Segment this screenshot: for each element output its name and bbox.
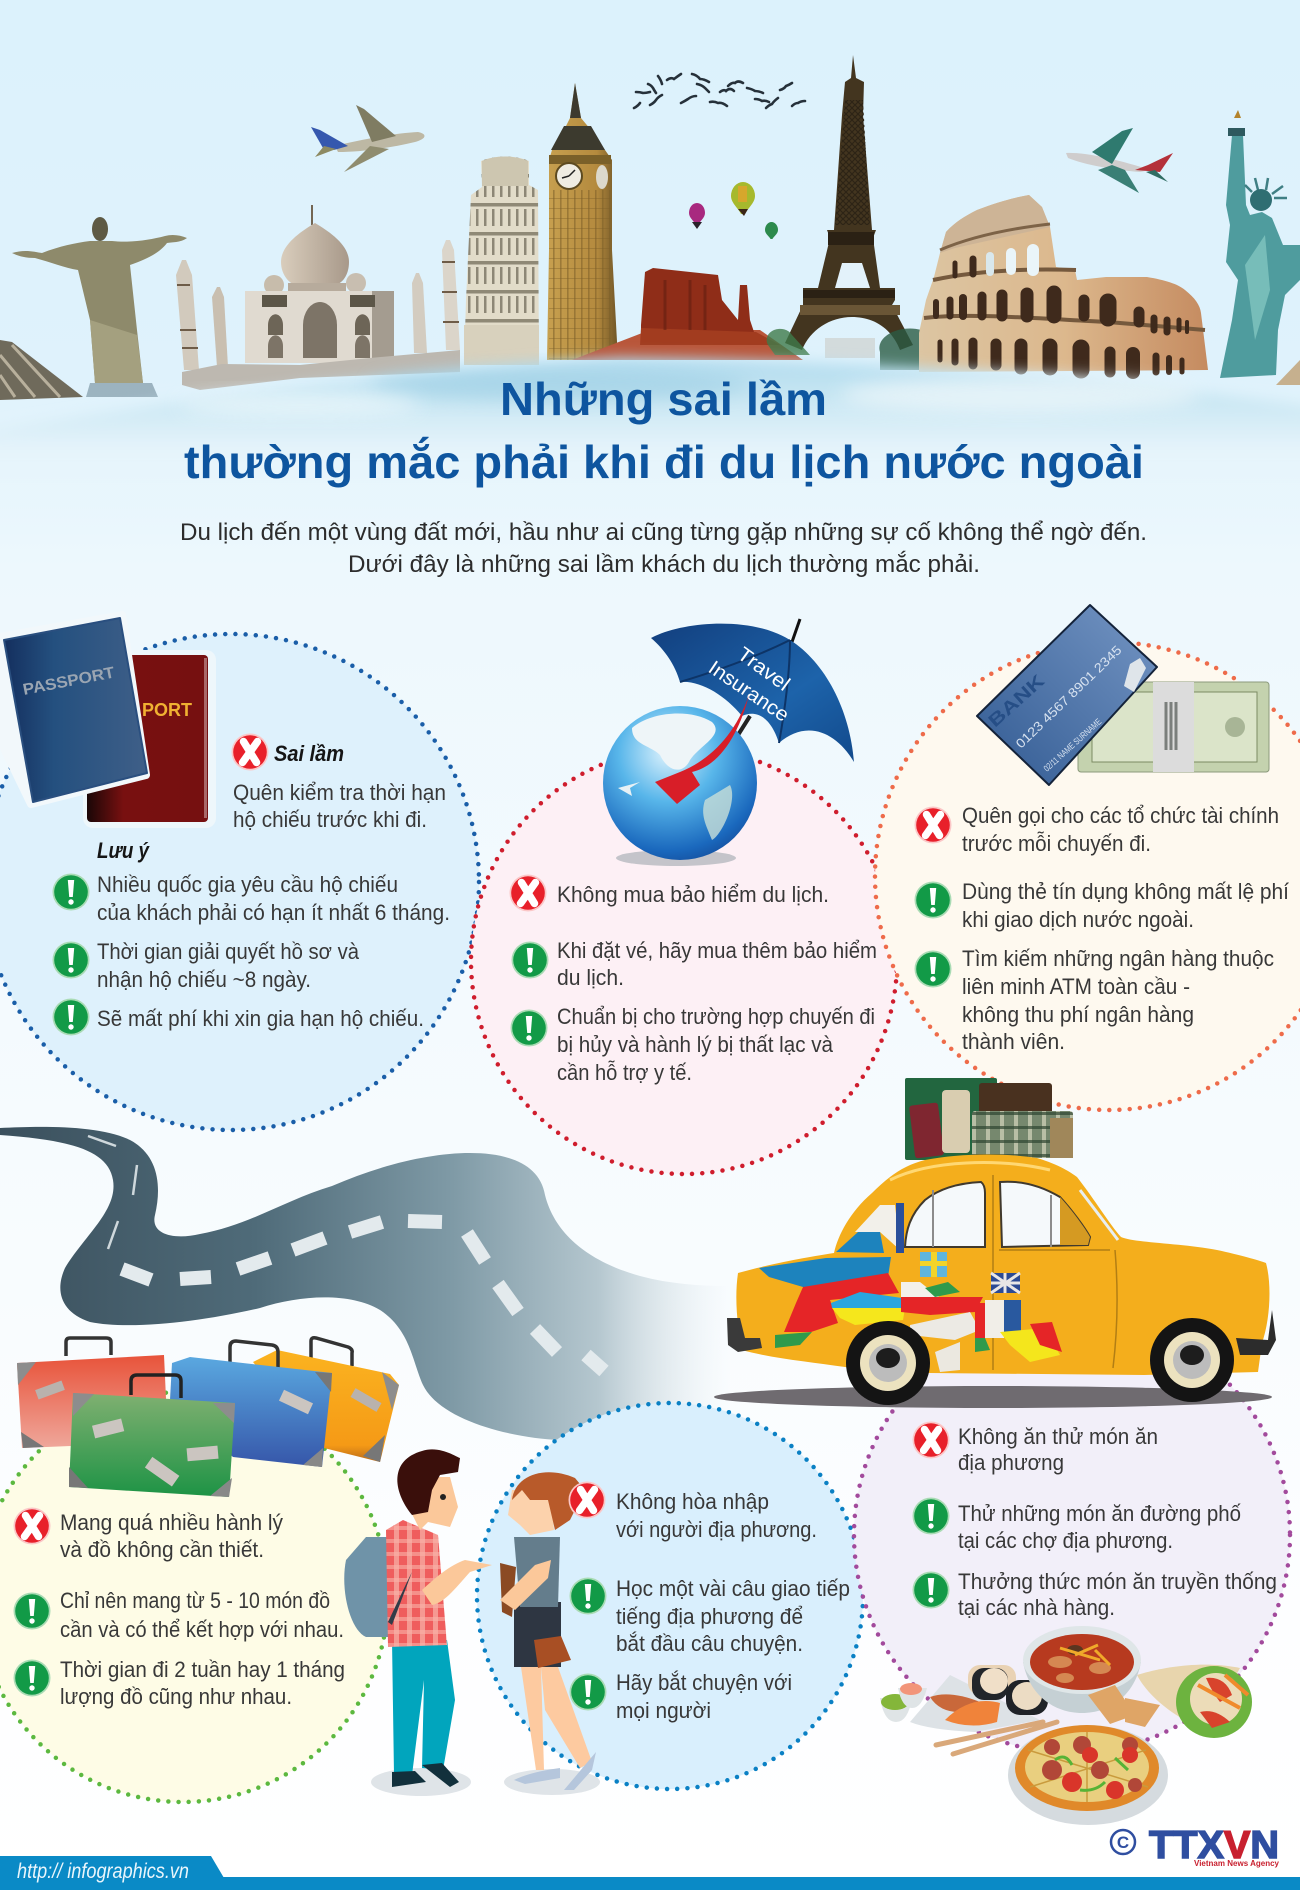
monument valley butte bbox=[572, 268, 803, 360]
tip text: Học một vài câu giao tiếp bbox=[616, 1576, 850, 1601]
tip text: tại các chợ địa phương. bbox=[958, 1528, 1173, 1553]
rear wheel bbox=[1150, 1318, 1234, 1402]
url tab bbox=[0, 1856, 224, 1878]
sushi plate bbox=[910, 1665, 1048, 1732]
panel: bank cards bbox=[875, 642, 1300, 1110]
Colosseum bbox=[919, 195, 1208, 372]
title bbox=[184, 373, 1144, 488]
tip text bbox=[616, 1576, 850, 1656]
circle background bbox=[0, 634, 479, 1130]
icon: tip bbox=[52, 998, 90, 1036]
roof highlight bbox=[890, 1163, 1050, 1180]
icon: globe with arrow bbox=[603, 695, 757, 866]
icon: passports: PASSPORT bbox=[22, 664, 116, 699]
icon: tip bbox=[570, 1578, 606, 1614]
green suitcase bbox=[69, 1375, 235, 1497]
icon: passports bbox=[0, 615, 216, 828]
TTXVN wordmark: TTXVN bbox=[1149, 1824, 1279, 1867]
tip text: du lịch. bbox=[557, 965, 624, 990]
small pyramid right bbox=[1276, 360, 1300, 385]
icon: credit card: 0123 4567 8901 2345 bbox=[1013, 642, 1125, 751]
tip text: bị hủy và hành lý bị thất lạc và bbox=[557, 1032, 834, 1057]
tip text: tại các nhà hàng. bbox=[958, 1595, 1115, 1620]
tip text: Nhiều quốc gia yêu cầu hộ chiếu bbox=[97, 872, 398, 897]
mistake text bbox=[60, 1510, 283, 1562]
tip text: cần và có thể kết hợp với nhau. bbox=[60, 1617, 344, 1642]
tip text: thành viên. bbox=[962, 1029, 1065, 1054]
orange suitcase bbox=[253, 1338, 399, 1462]
panel: local food bbox=[854, 1317, 1290, 1753]
tip text bbox=[97, 939, 360, 992]
mistake text: Mang quá nhiều hành lý bbox=[60, 1510, 283, 1535]
tip text: bắt đầu câu chuyện. bbox=[616, 1631, 803, 1656]
url text: http:// infographics.vn bbox=[17, 1860, 189, 1883]
icon: umbrella: Insurance bbox=[704, 657, 793, 727]
mistake text: Không ăn thử món ăn bbox=[958, 1424, 1158, 1449]
soup bowl bbox=[1023, 1626, 1141, 1713]
tip text bbox=[962, 946, 1274, 1054]
panel: travel insurance bbox=[471, 748, 897, 1174]
mistake text: trước mỗi chuyến đi. bbox=[962, 831, 1151, 856]
mistake heading: Sai lầm bbox=[274, 741, 344, 766]
tip text: Hãy bắt chuyện với bbox=[616, 1670, 792, 1695]
icon: tip bbox=[510, 1010, 548, 1046]
mistake text: với người địa phương. bbox=[616, 1517, 817, 1542]
icon: tip bbox=[912, 1572, 950, 1608]
circle background bbox=[875, 642, 1300, 1110]
windows bbox=[905, 1182, 1118, 1247]
icon: banknotes bbox=[1078, 682, 1269, 772]
illustration: boy and girl talking bbox=[344, 1449, 600, 1796]
icon: passports: PORT bbox=[142, 700, 192, 720]
mistake text bbox=[958, 1424, 1158, 1475]
tip text: mọi người bbox=[616, 1698, 711, 1723]
tip text bbox=[962, 879, 1289, 932]
door lines bbox=[993, 1175, 1117, 1370]
mistake text: và đồ không cần thiết. bbox=[60, 1537, 264, 1562]
suitcases bbox=[17, 1338, 399, 1497]
tip text: Tìm kiếm những ngân hàng thuộc bbox=[962, 946, 1274, 971]
footer bar bbox=[0, 1856, 1300, 1890]
note heading: Lưu ý bbox=[97, 838, 150, 863]
icon: mistake bbox=[912, 1422, 950, 1458]
icon: tip bbox=[52, 942, 90, 978]
title: thường mắc phải khi đi du lịch nước ngoài bbox=[184, 436, 1144, 488]
mistake text: hộ chiếu trước khi đi. bbox=[233, 807, 427, 832]
tip text bbox=[557, 938, 877, 990]
tip text: Chuẩn bị cho trường hợp chuyến đi bbox=[557, 1004, 875, 1029]
copyright symbol bbox=[1111, 1830, 1135, 1854]
tip text: Chỉ nên mang từ 5 - 10 món đồ bbox=[60, 1588, 330, 1613]
mistake text: Không hòa nhập bbox=[616, 1489, 769, 1514]
chopsticks bbox=[936, 1722, 1057, 1754]
tip text: cần hỗ trợ y tế. bbox=[557, 1060, 692, 1085]
panel: locals bbox=[477, 1403, 863, 1789]
copyright symbol: C bbox=[1117, 1833, 1129, 1852]
tip text: Thưởng thức món ăn truyền thống bbox=[958, 1569, 1277, 1594]
bumpers bbox=[727, 1318, 762, 1352]
girl bbox=[500, 1472, 596, 1790]
tip text bbox=[60, 1657, 345, 1709]
circle background bbox=[471, 748, 897, 1174]
tip text: lượng đồ cũng như nhau. bbox=[60, 1684, 292, 1709]
icon: mistake (locals panel) bbox=[568, 1482, 606, 1518]
globe water horizon bbox=[0, 358, 1300, 500]
small sauce bowls bbox=[880, 1683, 927, 1722]
mistake text: Không mua bảo hiểm du lịch. bbox=[557, 882, 829, 907]
tip text bbox=[60, 1588, 344, 1642]
illustration: car with luggage bbox=[714, 1078, 1276, 1408]
mistake text bbox=[616, 1489, 817, 1542]
circle background bbox=[854, 1317, 1290, 1753]
Statue of Liberty bbox=[1220, 110, 1300, 378]
icon: credit card: BANK bbox=[984, 671, 1048, 731]
landmarks skyline bbox=[0, 55, 1300, 400]
car body bbox=[736, 1154, 1269, 1375]
icon: mistake bbox=[914, 806, 952, 844]
Pisa tower bbox=[464, 156, 539, 365]
ground shadows bbox=[371, 1768, 471, 1796]
icon: mistake bbox=[232, 734, 268, 770]
balloons bbox=[689, 182, 778, 239]
boy bbox=[344, 1449, 492, 1787]
icon: umbrella bbox=[651, 619, 854, 762]
plane right bbox=[1066, 128, 1173, 193]
icon: credit card bbox=[977, 605, 1157, 785]
car shadow bbox=[714, 1386, 1272, 1408]
tip text: không thu phí ngân hàng bbox=[962, 1002, 1194, 1027]
icon: tip bbox=[14, 1592, 50, 1630]
mistake text bbox=[233, 780, 446, 832]
icon: mistake bbox=[14, 1508, 50, 1544]
icon: tip bbox=[914, 950, 952, 988]
Taj Mahal bbox=[176, 205, 460, 390]
icon: tip bbox=[512, 942, 548, 978]
icon: tip bbox=[912, 1498, 950, 1534]
tip text bbox=[958, 1569, 1277, 1620]
logo bbox=[1111, 1824, 1279, 1868]
blue suitcase bbox=[170, 1341, 332, 1467]
mistake text bbox=[962, 803, 1279, 856]
crackers bbox=[1088, 1685, 1160, 1727]
mistake text: Quên kiểm tra thời hạn bbox=[233, 780, 446, 805]
mistake text: địa phương bbox=[958, 1450, 1064, 1475]
tip text bbox=[557, 1004, 875, 1085]
plane left bbox=[311, 105, 424, 172]
pyramid bbox=[0, 340, 83, 400]
circle background bbox=[0, 1392, 388, 1802]
icon: tip bbox=[570, 1674, 606, 1710]
tip text: Sẽ mất phí khi xin gia hạn hộ chiếu. bbox=[97, 1006, 424, 1031]
icon: credit card: 02/11 NAME SURNAME bbox=[1042, 717, 1103, 773]
roof luggage bbox=[905, 1078, 1073, 1160]
shadow bbox=[504, 1769, 600, 1795]
intro text bbox=[180, 519, 1147, 578]
front wheel bbox=[846, 1321, 930, 1405]
tip text: liên minh ATM toàn cầu - bbox=[962, 974, 1190, 999]
tip text bbox=[616, 1670, 792, 1723]
tip text: Thời gian đi 2 tuần hay 1 tháng bbox=[60, 1657, 345, 1682]
tip text: Thử những món ăn đường phố bbox=[958, 1501, 1241, 1526]
Big Ben bbox=[547, 83, 618, 360]
tip text bbox=[97, 872, 450, 925]
icon: tip bbox=[914, 882, 952, 918]
wrap bbox=[1137, 1665, 1252, 1738]
agency name: Vietnam News Agency bbox=[1194, 1858, 1279, 1868]
birds bbox=[634, 74, 805, 108]
tip text: khi giao dịch nước ngoài. bbox=[962, 907, 1194, 932]
circle background bbox=[477, 1403, 863, 1789]
red suitcase bbox=[17, 1338, 168, 1448]
icon: mistake bbox=[510, 874, 546, 912]
tip text bbox=[958, 1501, 1241, 1553]
panel: luggage bbox=[0, 1392, 388, 1802]
tip text: tiếng địa phương để bbox=[616, 1604, 803, 1629]
tip text: của khách phải có hạn ít nhất 6 tháng. bbox=[97, 900, 450, 925]
panel: passport mistakes bbox=[0, 634, 479, 1130]
illustration: food bbox=[880, 1626, 1252, 1825]
icon: umbrella: Travel bbox=[733, 643, 794, 696]
mistake text: Quên gọi cho các tổ chức tài chính bbox=[962, 803, 1279, 828]
pizza bbox=[1008, 1725, 1168, 1825]
Eiffel tower bbox=[767, 55, 940, 370]
tip text: Dùng thẻ tín dụng không mất lệ phí bbox=[962, 879, 1289, 904]
icon: tip bbox=[52, 874, 90, 910]
intro text: Du lịch đến một vùng đất mới, hầu như ai cũng từng gặp những sự cố không thể ngờ đến. bbox=[180, 519, 1147, 546]
title: Những sai lầm bbox=[500, 373, 827, 425]
intro text: Dưới đây là những sai lầm khách du lịch thường mắc phải. bbox=[348, 551, 980, 578]
tip text: Khi đặt vé, hãy mua thêm bảo hiểm bbox=[557, 938, 877, 963]
Christ statue bbox=[12, 217, 187, 397]
icon: tip bbox=[14, 1660, 50, 1696]
tip text: Thời gian giải quyết hồ sơ và bbox=[97, 939, 360, 964]
tip text: nhận hộ chiếu ~8 ngày. bbox=[97, 967, 311, 992]
road bbox=[0, 1127, 730, 1445]
flag map on car bbox=[759, 1203, 1062, 1372]
